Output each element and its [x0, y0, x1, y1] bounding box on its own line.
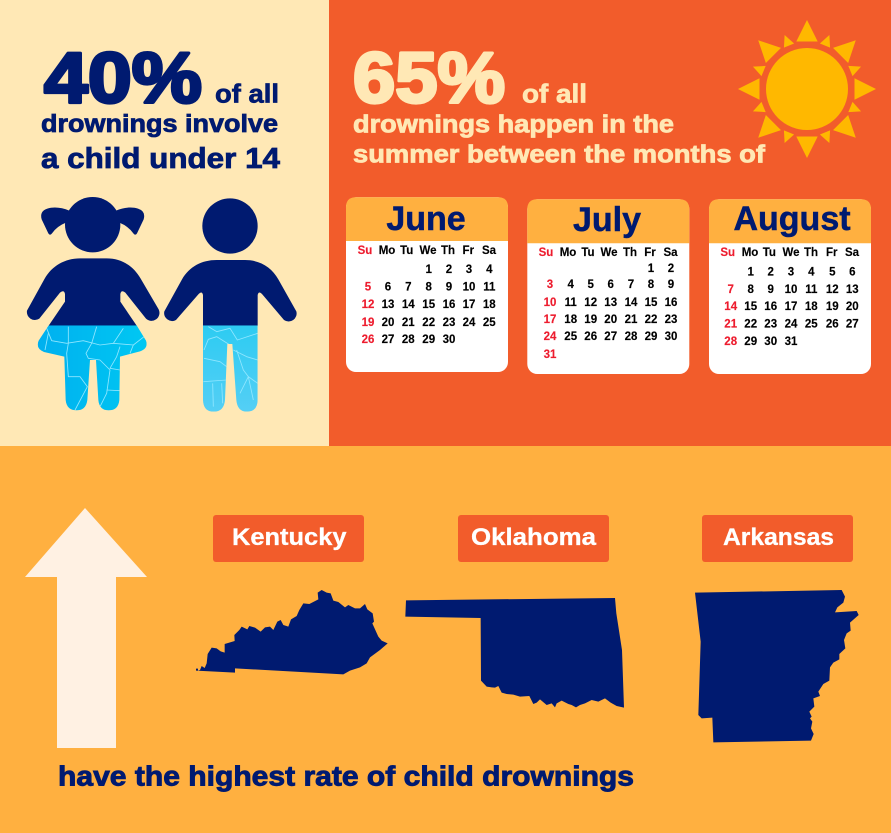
dates: 31	[785, 336, 798, 348]
dates: 7	[727, 284, 734, 296]
map: Arkansas	[695, 590, 859, 742]
dates: 3	[547, 279, 553, 291]
dates: 25	[483, 317, 496, 329]
dates: 3	[466, 264, 472, 276]
text: drownings happen in the: drownings happen in the	[353, 111, 674, 139]
dates: 27	[846, 318, 859, 330]
weekday row: Fr	[463, 245, 475, 257]
dates: 21	[625, 314, 638, 326]
weekday row: Fr	[826, 247, 838, 259]
heading: 65% of all drownings happen in the summer between the months of	[353, 40, 766, 169]
dates: 18	[564, 314, 578, 326]
arrow: up	[25, 508, 147, 748]
dates: 24	[544, 331, 557, 343]
dates: 19	[826, 301, 839, 313]
dates: 5	[365, 282, 372, 294]
map: Oklahoma	[405, 598, 624, 708]
panel: highest rate states background	[0, 446, 891, 833]
dates	[724, 266, 859, 348]
dates: 17	[785, 301, 797, 313]
dates: 16	[443, 299, 455, 311]
weekday row	[539, 247, 678, 259]
dates: 12	[362, 299, 374, 311]
dates: 23	[443, 317, 455, 329]
label: Arkansas: Arkansas	[723, 524, 834, 551]
weekday row	[720, 247, 860, 259]
text: of all: of all	[522, 79, 587, 109]
weekday row: We	[782, 247, 800, 259]
dates: 21	[402, 317, 415, 329]
dates: 5	[587, 279, 594, 291]
dates: 26	[826, 318, 839, 330]
heading: 40% of all drownings involve a child under 14	[41, 40, 280, 175]
label: Oklahoma: Oklahoma	[471, 524, 597, 551]
dates: 20	[846, 301, 859, 313]
text: summer between the months of: summer between the months of	[353, 141, 766, 169]
dates: 28	[402, 334, 415, 346]
dates: 16	[665, 297, 677, 309]
dates: 6	[849, 266, 856, 278]
dates: 29	[422, 334, 435, 346]
month header: July	[527, 199, 689, 243]
month name: August: August	[733, 200, 851, 238]
dates: 11	[483, 282, 496, 294]
dates: 11	[805, 284, 818, 296]
dates: 16	[764, 301, 777, 313]
weekday row: Th	[441, 245, 455, 257]
dates: 15	[645, 297, 658, 309]
dates: 30	[764, 336, 777, 348]
icon: girl	[27, 197, 159, 413]
weekday row: Sa	[845, 247, 860, 259]
dates: 6	[385, 282, 391, 294]
dates: 30	[665, 331, 677, 343]
dates: 3	[788, 266, 794, 278]
dates: 29	[645, 331, 657, 343]
panel: 40% statistic background	[0, 0, 329, 446]
dates	[362, 264, 496, 346]
dates: 12	[826, 284, 839, 296]
dates: 15	[744, 301, 758, 313]
dates: 2	[668, 263, 674, 275]
weekday row: Tu	[581, 247, 595, 259]
icon: sun	[738, 20, 876, 158]
dates: 8	[425, 282, 432, 294]
big number 40%: 40%	[44, 40, 202, 118]
dates: 4	[567, 279, 574, 291]
weekday row: Tu	[400, 245, 413, 257]
dates: 6	[607, 279, 614, 291]
dates: 28	[724, 336, 738, 348]
dates: 30	[443, 334, 455, 346]
text: drownings involve: drownings involve	[41, 110, 278, 138]
dates: 8	[747, 284, 754, 296]
dates: 12	[584, 297, 597, 309]
dates: 7	[628, 279, 634, 291]
label: Arkansas	[702, 515, 853, 562]
dates: 19	[362, 317, 374, 329]
text: a child under 14: a child under 14	[41, 143, 280, 175]
weekday row: Mo	[379, 245, 395, 257]
weekday row: Sa	[663, 247, 678, 259]
dates: 24	[463, 317, 476, 329]
dates: 14	[625, 297, 638, 309]
weekday row: We	[600, 247, 618, 259]
label: Oklahoma	[458, 515, 609, 562]
dates: 25	[805, 318, 818, 330]
dates: 26	[584, 331, 597, 343]
text: of all: of all	[215, 79, 279, 109]
label: Kentucky	[213, 515, 364, 562]
calendar: June	[346, 197, 508, 372]
dates: 4	[486, 264, 493, 276]
dates: 17	[463, 299, 475, 311]
dates: 2	[446, 264, 452, 276]
dates: 8	[648, 279, 655, 291]
dates: 9	[668, 279, 674, 291]
dates: 19	[584, 314, 597, 326]
dates: 17	[544, 314, 556, 326]
weekday row: Fr	[644, 247, 656, 259]
dates: 11	[565, 297, 577, 309]
dates: 13	[846, 284, 859, 296]
dates: 20	[382, 317, 394, 329]
weekday row: Th	[804, 247, 818, 259]
dates: 27	[382, 334, 394, 346]
dates: 10	[544, 297, 556, 309]
dates: 1	[747, 266, 754, 278]
calendar: August	[709, 199, 871, 374]
dates: 2	[767, 266, 774, 278]
map: Kentucky	[196, 590, 388, 674]
label: Kentucky: Kentucky	[232, 524, 347, 551]
dates: 25	[564, 331, 578, 343]
dates: 1	[648, 263, 655, 275]
dates: 5	[829, 266, 836, 278]
dates: 18	[805, 301, 818, 313]
dates	[544, 263, 677, 361]
dates: 15	[422, 299, 436, 311]
dates: 31	[544, 349, 557, 361]
dates: 14	[724, 301, 738, 313]
icon: girl and boy standing in water	[27, 197, 297, 413]
dates: 9	[446, 282, 452, 294]
month name: July: July	[573, 201, 641, 239]
dates: 4	[808, 266, 815, 278]
dates: 22	[744, 318, 757, 330]
weekday row: Su	[720, 247, 735, 259]
dates: 24	[785, 318, 798, 330]
month header: August	[709, 199, 871, 243]
dates: 9	[767, 284, 774, 296]
weekday row: Sa	[482, 245, 497, 257]
dates: 21	[724, 318, 738, 330]
weekday row: Mo	[742, 247, 758, 259]
dates: 22	[422, 317, 435, 329]
weekday row: Mo	[560, 247, 576, 259]
weekday row: Tu	[763, 247, 776, 259]
dates: 10	[463, 282, 475, 294]
dates: 1	[425, 264, 432, 276]
dates: 29	[744, 336, 757, 348]
dates: 13	[604, 297, 617, 309]
weekday row: Su	[358, 245, 372, 257]
dates: 22	[645, 314, 657, 326]
dates: 27	[604, 331, 617, 343]
dates: 14	[402, 299, 415, 311]
dates: 13	[382, 299, 394, 311]
month header: June	[346, 197, 508, 241]
dates: 20	[604, 314, 617, 326]
dates: 23	[665, 314, 677, 326]
weekday row: Th	[623, 247, 637, 259]
dates: 7	[405, 282, 412, 294]
dates: 26	[362, 334, 374, 346]
month name: June: June	[386, 200, 466, 238]
calendar: July	[527, 199, 689, 374]
panel: 65% statistic background	[329, 0, 891, 446]
dates: 18	[483, 299, 496, 311]
dates: 28	[625, 331, 638, 343]
dates: 23	[764, 318, 777, 330]
weekday row: Su	[539, 247, 553, 259]
icon: boy	[164, 198, 297, 413]
caption: have the highest rate of child drownings: have the highest rate of child drownings	[58, 761, 634, 792]
dates: 10	[785, 284, 797, 296]
big number 65%: 65%	[353, 40, 505, 118]
weekday row	[358, 245, 497, 257]
weekday row: We	[419, 245, 437, 257]
